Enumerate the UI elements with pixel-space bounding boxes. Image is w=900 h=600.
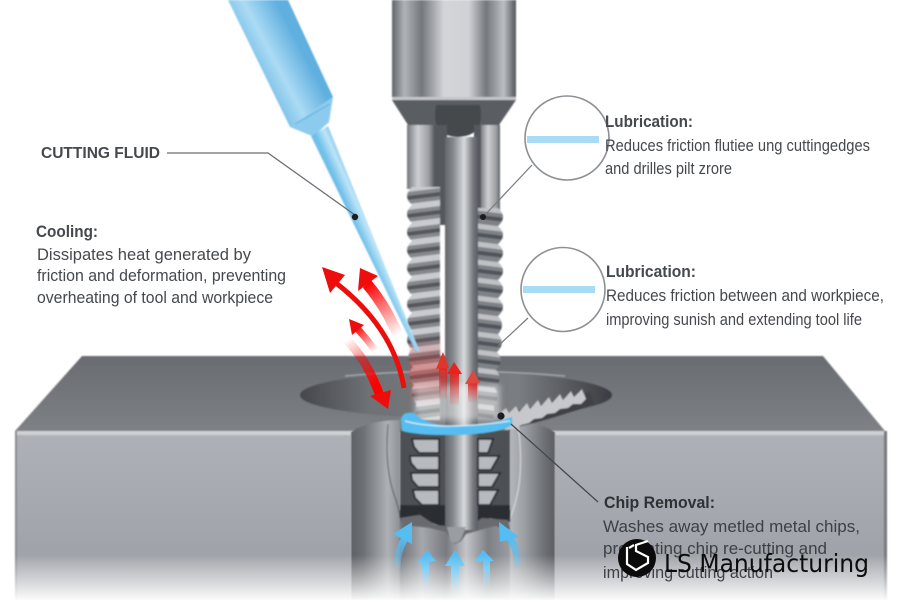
glow around the cutting zone [415, 385, 500, 420]
cutting fluid ring [401, 413, 512, 435]
coolant arrows [393, 522, 519, 593]
text block: chip removal: Washes away metled metal chips, [603, 518, 860, 536]
logo wordmark: LS Manufacturing [664, 549, 869, 578]
logo mark [618, 539, 656, 577]
chamfer [392, 100, 516, 125]
big arc arrow [336, 283, 404, 388]
right thread [476, 208, 503, 420]
nozzle collar [290, 97, 333, 136]
text block: lubrication 2: Lubrication: [606, 262, 696, 281]
workpiece block [15, 356, 887, 600]
lubrication lens 1 [525, 96, 609, 180]
text block: cooling [36, 222, 286, 307]
text block: lubrication 1: Reduces friction flutiee ung cuttingedges [605, 137, 870, 155]
text block: chip removal: Chip Removal: [604, 493, 715, 512]
heat tint on thread [409, 335, 441, 405]
heat arrows [322, 267, 480, 409]
logo: LS Manufacturing [618, 539, 869, 578]
shank [392, 0, 516, 100]
text block: lubrication 2: Reduces friction between and workpiece, [606, 287, 884, 305]
text block: chip removal [603, 493, 860, 582]
lower threads in hole [410, 439, 500, 505]
leader: cutting fluid [167, 153, 358, 220]
down arrow [347, 340, 380, 396]
tip [447, 527, 466, 543]
label: cutting fluid: CUTTING FLUID [41, 145, 160, 162]
text block: cooling: overheating of tool and workpiece [37, 289, 273, 307]
text block: lubrication 1 [605, 112, 870, 178]
text block: chip removal: improving cutting action [603, 564, 773, 582]
text block: chip removal: preventing chip re-cutting and [603, 540, 827, 558]
text block: cooling: Dissipates heat generated by [37, 246, 252, 264]
metal chip [500, 389, 594, 430]
text block: lubrication 1: and drilles pilt zrore [605, 160, 732, 178]
bored hole in section [351, 420, 555, 600]
neck flutes [407, 125, 434, 189]
nozzle body [228, 0, 333, 127]
text block: lubrication 2 [606, 262, 884, 329]
thread cavity with tool tip [400, 430, 510, 544]
small arrow [356, 327, 375, 350]
tap tool [392, 0, 516, 543]
bottom fade [0, 555, 900, 600]
needle [311, 126, 420, 352]
text block: cooling: friction and deformation, preventing [37, 267, 286, 285]
leader: lubrication 1 [480, 165, 532, 220]
up arrows on tool [439, 366, 447, 400]
second arrow [367, 284, 398, 335]
fluid nozzle [228, 0, 420, 352]
text block: cooling: Cooling: [36, 222, 98, 241]
text block: lubrication 2: improving sunish and extending tool life [606, 311, 862, 329]
left thread [407, 187, 440, 420]
text block: lubrication 1: Lubrication: [605, 112, 693, 131]
lubrication lens 2 [521, 248, 605, 332]
leader: lubrication 2 [498, 318, 528, 346]
hole opening [300, 371, 612, 418]
leader: chip removal [497, 412, 598, 502]
core [445, 137, 478, 530]
